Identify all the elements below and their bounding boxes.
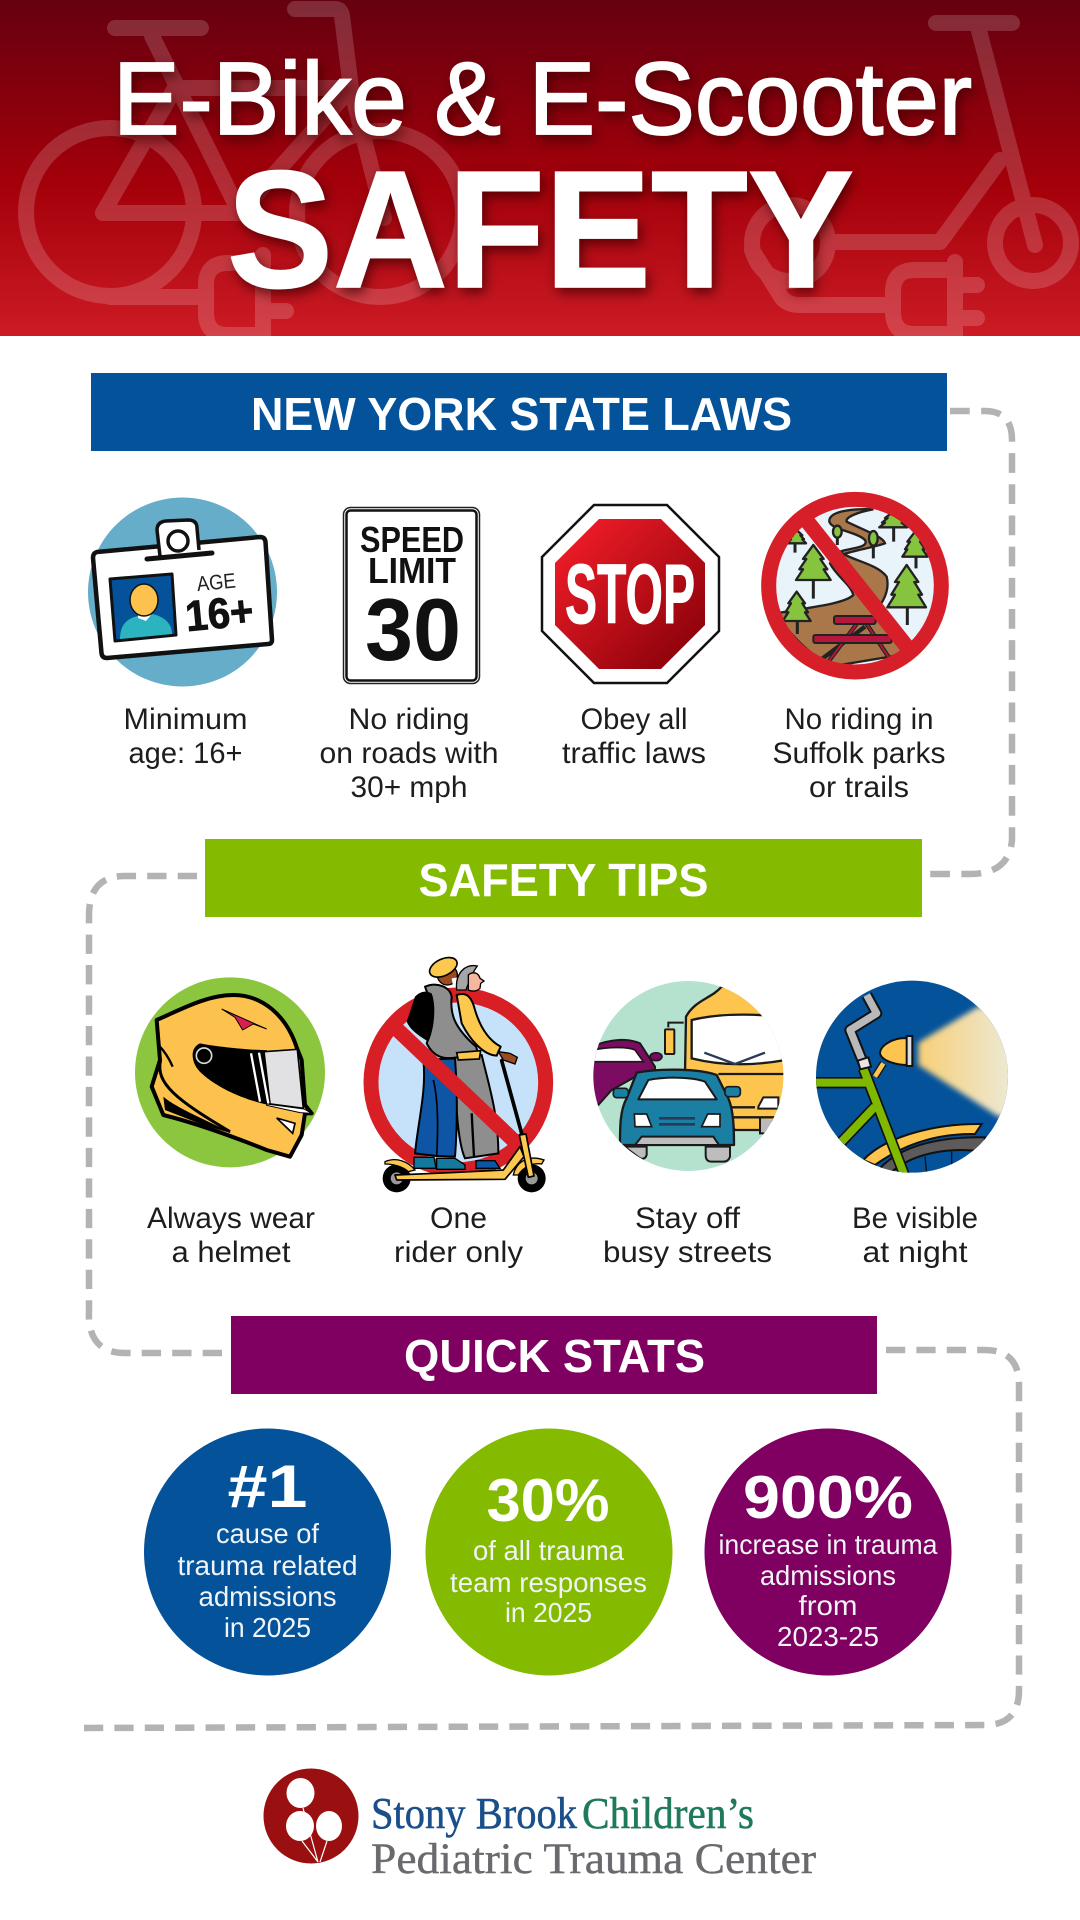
caption: no riding in parks: No riding in	[784, 703, 934, 736]
stat: 30%	[426, 1428, 672, 1676]
caption: stay off busy streets: Stay off	[635, 1202, 741, 1235]
text: stony brook children's: Children’s	[582, 1789, 754, 1838]
caption: no riding in parks	[772, 703, 946, 804]
heading bar: quick stats	[231, 1316, 877, 1394]
icon: speed limit 30 sign	[344, 508, 480, 684]
heading bar: quick stats: QUICK STATS	[404, 1330, 705, 1382]
caption: obey traffic laws	[562, 703, 706, 770]
caption: obey traffic laws: traffic laws	[562, 737, 706, 770]
text: stony brook children's	[371, 1789, 754, 1838]
caption: no riding in parks: Suffolk parks	[772, 737, 946, 770]
stat: 30%: team responses	[450, 1567, 647, 1598]
stat: #1 cause: admissions	[198, 1581, 336, 1612]
caption: minimum age: age: 16+	[128, 737, 242, 770]
caption: be visible at night: at night	[862, 1236, 968, 1269]
stat: 900%	[704, 1428, 952, 1676]
text: pediatric trauma center: Pediatric Trauma Center	[371, 1836, 816, 1883]
stat: 900%: admissions	[760, 1560, 896, 1591]
heading bar: safety tips	[205, 839, 922, 917]
icon: stop sign: STOP	[565, 547, 695, 641]
caption: stay off busy streets: busy streets	[603, 1236, 772, 1269]
stat: 30%: 30%	[486, 1467, 610, 1534]
text: stony brook children's: Stony Brook	[371, 1789, 577, 1838]
caption: no riding on roads: on roads with	[320, 737, 498, 770]
stat: #1 cause: trauma related	[178, 1550, 358, 1581]
stat: 900%: 900%	[743, 1464, 913, 1531]
caption: one rider only: One	[430, 1202, 487, 1235]
header banner	[0, 0, 1080, 336]
caption: minimum age	[124, 703, 248, 770]
icon: stay off busy streets	[592, 981, 788, 1171]
stat: 900%: increase in trauma	[718, 1529, 938, 1560]
stat: 30%: in 2025	[505, 1597, 592, 1628]
stat: 900%: from	[798, 1590, 858, 1621]
icon: speed limit 30 sign: 30	[365, 580, 461, 679]
icon: helmet	[135, 977, 325, 1167]
dashed connector: laws to tips	[930, 411, 1012, 874]
heading bar: new york state laws	[91, 373, 947, 451]
heading bar: safety tips: SAFETY TIPS	[418, 854, 708, 906]
caption: no riding on roads: No riding	[348, 703, 470, 736]
caption: stay off busy streets	[603, 1202, 772, 1269]
stat: #1 cause: cause of	[216, 1518, 319, 1549]
title: E-Bike & E-Scooter: E-Bike & E-Scooter	[113, 41, 972, 156]
panel: safety tips	[135, 839, 1015, 1269]
heading bar: new york state laws: NEW YORK STATE LAWS	[251, 388, 792, 440]
icon: speed limit 30 sign: SPEED	[360, 519, 464, 560]
caption: minimum age: Minimum	[124, 703, 248, 736]
dashed connector: tips to stats	[89, 876, 222, 1353]
stat: #1 cause: #1	[228, 1453, 308, 1520]
caption: be visible at night: Be visible	[852, 1202, 978, 1235]
icon: speed limit 30 sign: LIMIT	[368, 550, 456, 591]
title: SAFETY: SAFETY	[227, 137, 854, 323]
caption: no riding on roads	[320, 703, 498, 804]
icon: id badge age 16+	[88, 498, 277, 686]
text: AGE: AGE	[196, 570, 237, 596]
caption: one rider only	[394, 1202, 523, 1269]
caption: be visible at night	[852, 1202, 978, 1269]
caption: no riding on roads: 30+ mph	[350, 771, 468, 804]
stat: #1 cause: in 2025	[224, 1612, 311, 1643]
icon: ghost e-scooter	[752, 23, 1071, 336]
stat: 900%: 2023-25	[777, 1621, 879, 1652]
caption: no riding in parks: or trails	[809, 771, 909, 804]
panel: new york state laws	[88, 373, 947, 804]
icon: balloons logo	[264, 1768, 358, 1864]
caption: always wear a helmet: a helmet	[172, 1236, 290, 1269]
caption: one rider only: rider only	[394, 1236, 523, 1269]
caption: always wear a helmet: Always wear	[147, 1202, 315, 1235]
icon: be visible at night	[813, 981, 1015, 1177]
panel: quick stats	[144, 1316, 952, 1676]
stat: 30%: of all trauma	[473, 1535, 624, 1566]
stat: #1 cause	[144, 1428, 391, 1676]
footer logo: stony brook children's	[264, 1768, 816, 1883]
icon: no riding in parks	[765, 496, 945, 676]
icon: ghost e-bike	[26, 9, 463, 336]
icon: stop sign	[542, 505, 719, 683]
icon: one rider only	[371, 954, 546, 1192]
caption: obey traffic laws: Obey all	[580, 703, 688, 736]
dashed connector: stats to footer	[84, 1350, 1019, 1728]
text: 16+: 16+	[183, 587, 256, 641]
caption: always wear a helmet	[147, 1202, 315, 1269]
